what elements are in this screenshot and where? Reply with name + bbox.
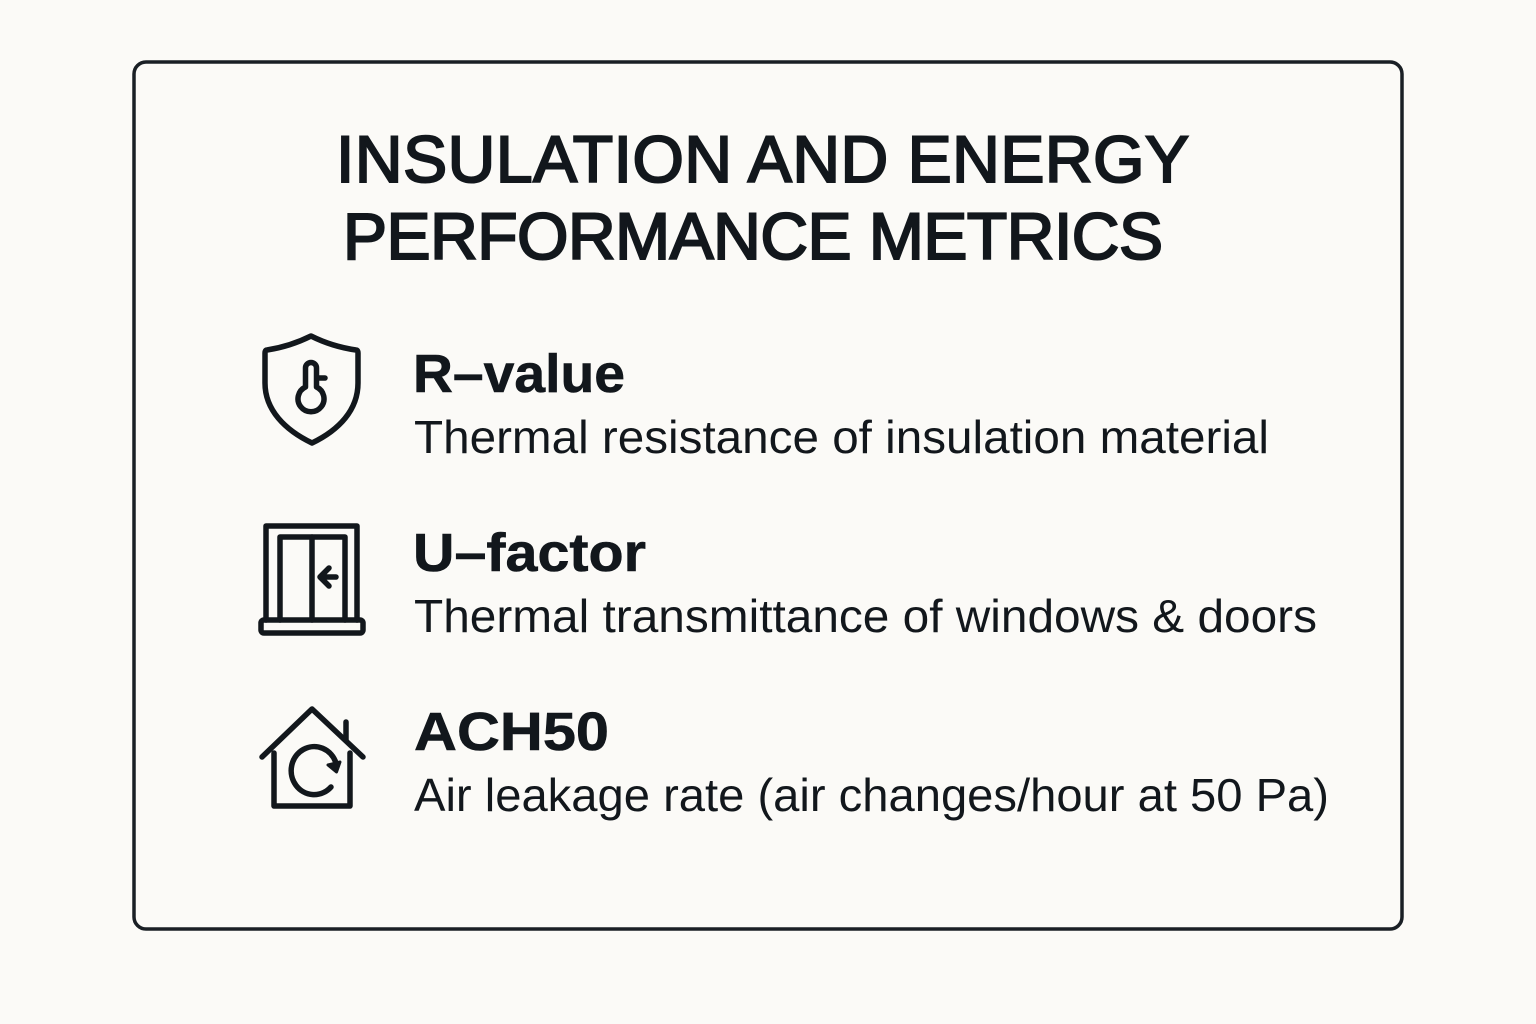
metric: R-value <box>265 336 1269 463</box>
description: R-value: Thermal resistance of insulation material <box>414 411 1269 463</box>
heading: U-factor: U–factor <box>413 523 646 583</box>
description: U-factor: Thermal transmittance of windows & doors <box>414 590 1317 642</box>
panel: metrics card <box>134 62 1402 929</box>
description: ACH50: Air leakage rate (air changes/hour at 50 Pa) <box>414 769 1329 821</box>
title: INSULATION AND ENERGY <box>336 122 1189 196</box>
heading: ACH50: ACH50 <box>414 702 609 762</box>
title: PERFORMANCE METRICS <box>343 199 1163 273</box>
icon: shield with thermometer <box>265 336 358 443</box>
title <box>336 122 1189 273</box>
icon: house with air cycle <box>262 709 363 806</box>
icon: window with arrow <box>261 526 363 633</box>
heading: R-value: R–value <box>413 344 625 404</box>
metric: U-factor <box>261 523 1317 642</box>
metric: ACH50 <box>262 702 1329 821</box>
